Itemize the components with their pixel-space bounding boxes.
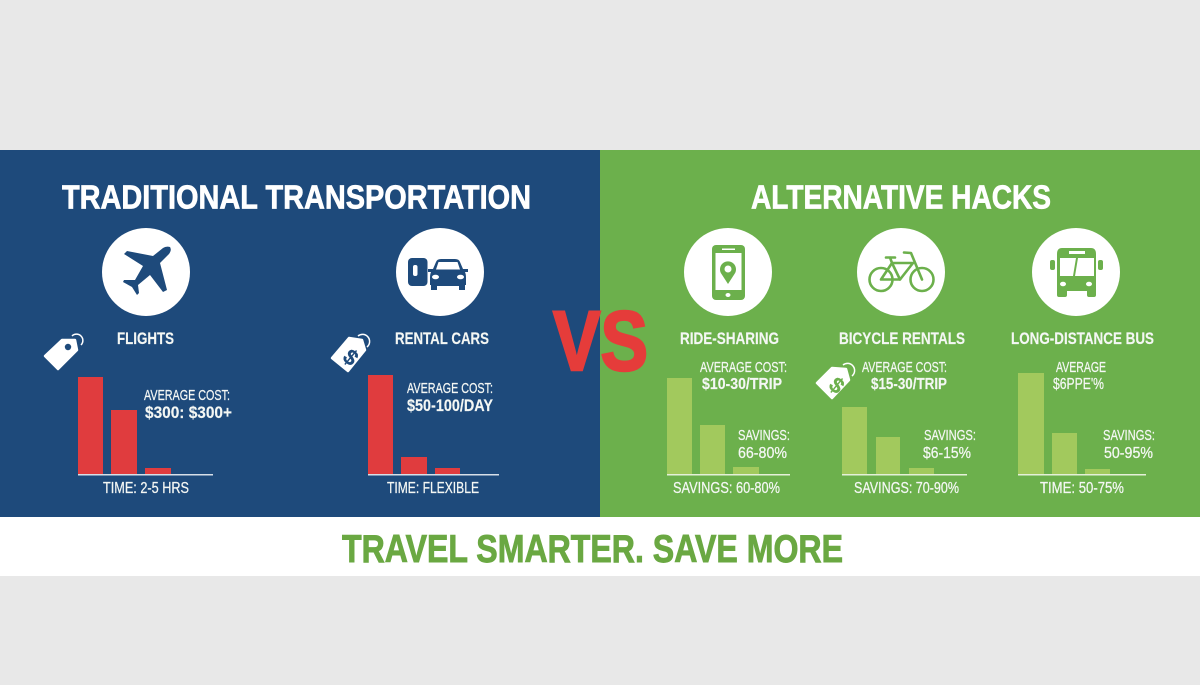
label: flights: FLIGHTS <box>117 329 174 348</box>
text: ride-sharing average cost <box>700 359 787 393</box>
text: bus savings: SAVINGS: <box>1103 427 1155 444</box>
text: flights average cost <box>144 387 232 422</box>
text: flights time: TIME: 2-5 HRS <box>103 480 189 497</box>
text: ride-sharing savings: SAVINGS: <box>738 427 790 444</box>
text: bicycle savings: SAVINGS: <box>924 427 976 444</box>
icon: dollar price tag <box>817 363 855 399</box>
card: long-distance bus <box>1011 228 1155 497</box>
label: ride-sharing: RIDE-SHARING <box>680 329 779 348</box>
icon: dollar price tag: $ <box>824 372 850 399</box>
icon: bicycle <box>857 228 945 316</box>
heading: alternative hacks: ALTERNATIVE HACKS <box>751 178 1051 216</box>
text: bus average cost: AVERAGE <box>1056 359 1106 376</box>
text: bus savings: 50-95% <box>1104 445 1153 462</box>
text: bicycle average cost: $15-30/TRIP <box>871 376 947 393</box>
icon: price tag <box>45 334 83 369</box>
text: flights average cost: $300: $300+ <box>145 403 232 422</box>
text: rental time: TIME: FLEXIBLE <box>387 480 479 497</box>
icon: bus <box>1032 228 1120 316</box>
card: bicycle rentals <box>817 228 976 497</box>
text: bus time: TIME: 50-75% <box>1040 480 1124 497</box>
text: bicycle average cost <box>862 359 947 393</box>
icon: dollar price tag <box>332 334 370 371</box>
tagline: TRAVEL SMARTER. SAVE MORE <box>342 528 843 571</box>
text: ride-sharing average cost: AVERAGE COST: <box>700 359 787 376</box>
panel: traditional transportation <box>0 150 600 517</box>
icon: airplane <box>102 228 190 316</box>
icon: dollar price tag: $ <box>338 344 364 371</box>
text: ride-sharing savings: 66-80% <box>738 445 787 462</box>
text: bicycle bottom savings: SAVINGS: 70-90% <box>854 480 959 497</box>
card: flights <box>45 228 232 497</box>
text: flights average cost: AVERAGE COST: <box>144 387 230 404</box>
label: long-distance bus: LONG-DISTANCE BUS <box>1011 329 1154 348</box>
VS badge: VS <box>553 294 648 388</box>
bar chart: flights <box>78 377 213 476</box>
icon: car and key <box>396 228 484 316</box>
bar chart: ride-sharing <box>667 378 790 476</box>
bar chart: long-distance bus <box>1018 373 1146 476</box>
card: ride-sharing <box>667 228 790 497</box>
text: bus savings <box>1103 427 1155 462</box>
label: bicycle rentals: BICYCLE RENTALS <box>839 329 965 348</box>
bar chart: bicycle rentals <box>842 407 967 476</box>
text: rental average cost <box>407 380 494 415</box>
text: bicycle savings: $6-15% <box>923 445 971 462</box>
heading: traditional transportation: TRADITIONAL TRANSPORTATION <box>62 178 531 216</box>
text: ride-sharing bottom savings: SAVINGS: 60-80% <box>673 480 780 497</box>
tagline banner <box>0 517 1200 576</box>
icon: phone with pin <box>684 228 772 316</box>
text: rental average cost: $50-100/DAY <box>407 396 494 415</box>
label: rental cars: RENTAL CARS <box>395 329 489 348</box>
bar chart: rental cars <box>368 375 499 476</box>
text: bus average cost: $6PPE'% <box>1053 376 1104 393</box>
text: bicycle average cost: AVERAGE COST: <box>862 359 947 376</box>
text: rental average cost: AVERAGE COST: <box>407 380 493 397</box>
text: bus average cost <box>1053 359 1106 393</box>
text: ride-sharing savings <box>738 427 790 462</box>
card: rental cars <box>332 228 499 497</box>
panel: alternative hacks <box>600 150 1200 517</box>
text: ride-sharing average cost: $10-30/TRIP <box>702 376 782 393</box>
text: bicycle savings <box>923 427 976 462</box>
